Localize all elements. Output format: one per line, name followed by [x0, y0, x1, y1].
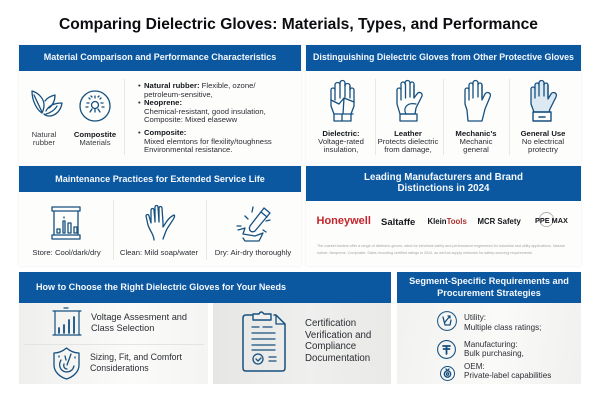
label: leather: from damage,	[384, 145, 432, 154]
title: Comparing Dielectric Gloves: Materials, Types, and Performance	[59, 16, 538, 33]
text: OEM	[464, 362, 551, 380]
icon: manufacturing	[437, 340, 456, 359]
heading: material comparison: Material Comparison and Performance Characteristics	[44, 52, 276, 62]
text: OEM: Private-label capabilities	[464, 371, 551, 380]
icon: general use glove	[530, 80, 558, 122]
icon: leaves	[31, 90, 63, 117]
sub-panel: assessment and sizing	[19, 303, 208, 384]
text: material bullets: petroleum-sensitive,	[144, 90, 213, 98]
heading: distinguishing gloves	[306, 45, 581, 70]
brand: PPE MAX: PPE MAX	[535, 216, 568, 225]
text: material bullets: Chemical-resistant, good insulation,	[144, 106, 266, 116]
text: material bullets: Composite:	[144, 128, 186, 137]
brand: Honeywell: Honeywell	[316, 215, 371, 227]
label: natural rubber: rubber	[33, 138, 55, 147]
icon: composite materials	[79, 90, 111, 122]
text: material bullets: Mixed elemtons for flexility/toughness	[144, 136, 272, 146]
panel: material comparison: •	[138, 81, 141, 90]
icon: dielectric glove	[330, 80, 355, 122]
label: mechanic's: Mechanic's	[455, 128, 497, 138]
icon: clean hand	[145, 204, 176, 241]
label: composite materials: Materials	[79, 138, 111, 147]
panel: material comparison: •	[138, 98, 141, 107]
panel: distinguishing gloves	[306, 45, 581, 162]
text: sizing fit comfort: Sizing, Fit, and Comfort	[90, 352, 182, 362]
text: manufacturing: Manufacturing:	[464, 340, 518, 349]
text: certification verification: Documentation	[305, 353, 370, 364]
panel: segment-specific requirements	[397, 272, 581, 384]
label: general use: protectry	[528, 145, 558, 154]
panel: material comparison: •	[138, 128, 141, 137]
text: material bullets: Neoprene:	[144, 98, 182, 107]
label: natural rubber: Natural	[32, 130, 56, 139]
text: utility	[464, 312, 541, 332]
label: mechanic's: Mechanic	[460, 137, 492, 146]
label: dielectric: insulation,	[324, 145, 358, 154]
heading: distinguishing gloves: Distinguishing Dielectric Gloves from Other Protective Gloves	[313, 52, 574, 62]
text: voltage assessment	[91, 312, 187, 333]
label: store: Store: Cool/dark/dry	[32, 248, 101, 257]
icon: dry brush	[236, 206, 271, 242]
label: dielectric	[318, 128, 364, 154]
text: voltage assessment: Voltage Assesment and	[91, 312, 187, 322]
text: material bullets: Natural rubber: Flexible, ozone/	[144, 81, 256, 90]
text: manufacturing: Bulk purchasing,	[464, 349, 524, 358]
label: general use: No electrical	[522, 137, 564, 146]
heading: how to choose: How to Choose the Right Dielectric Gloves for Your Needs	[36, 282, 286, 292]
heading: maintenance practices	[19, 166, 301, 192]
label: leather: Protects dielectric	[378, 137, 438, 146]
icon: mechanic glove	[464, 80, 492, 122]
text: material bullets: Environmental resistance.	[144, 145, 232, 154]
text: utility: Multiple class ratings;	[464, 322, 541, 332]
label: mechanic's	[455, 128, 497, 154]
sub-panel: certification	[213, 303, 391, 384]
label: general use	[520, 128, 566, 154]
label: dielectric: Voltage-rated	[318, 137, 364, 146]
text: sizing fit comfort: Considerations	[90, 363, 149, 373]
heading: maintenance practices: Maintenance Practices for Extended Service Life	[55, 174, 265, 184]
text: sizing fit comfort	[90, 352, 182, 373]
icon: leather glove	[396, 80, 423, 122]
heading: leading manufacturers	[306, 166, 581, 200]
text: certification verification: Verification and	[305, 330, 371, 341]
text: brand fine print: The market leaders offer a range of dielectric gloves, rated for electrical safety and performance engineered for industrial and utility applications. Natural rubber, Neoprene, Composite. Sales recording certified ratings in 2024, as well as supply networks for safety-sourcing requirements.	[317, 244, 565, 255]
heading: leading manufacturers: Leading Manufacturers and Brand	[364, 172, 523, 182]
icon: clipboard	[242, 311, 286, 372]
panel: leading manufacturers	[306, 166, 581, 266]
text: OEM: OEM:	[464, 362, 485, 370]
label: leather: Leather	[394, 128, 422, 138]
text: material bullets: Composite: Mixed elaseww	[144, 115, 237, 124]
heading: material comparison	[19, 45, 301, 70]
panel: material comparison	[19, 45, 301, 162]
icon: OEM	[440, 366, 455, 381]
brand: KleinTools: KleinTools	[428, 216, 467, 226]
icon: storage chart	[51, 206, 81, 240]
icon: voltage chart	[52, 307, 82, 336]
label: dry: Dry: Air-dry thoroughly	[215, 248, 291, 257]
heading: segment-specific requirements	[397, 272, 581, 303]
text: utility: Utility:	[464, 312, 486, 322]
label: composite materials	[74, 130, 116, 147]
heading: segment-specific requirements: Procurement Strategies	[437, 288, 541, 298]
text: certification verification: Certification	[305, 318, 356, 329]
label: general use: General Use	[521, 128, 565, 138]
heading: leading manufacturers: Distinctions in 2024	[397, 183, 490, 194]
label: natural rubber	[32, 130, 56, 147]
text: manufacturing	[464, 340, 524, 358]
label: clean: Clean: Mild soap/water	[120, 248, 198, 257]
brand: Saltaffe: Saltaffe	[381, 216, 415, 228]
label: dielectric: Dielectric:	[322, 128, 360, 138]
icon: utility	[437, 311, 457, 331]
panel: maintenance practices	[19, 166, 301, 266]
label: mechanic's: general	[463, 145, 489, 154]
text: voltage assessment: Class Selection	[91, 323, 154, 333]
icon: sizing shield	[53, 347, 80, 380]
label: composite materials: Compostite	[74, 130, 116, 139]
brand: MCR Safety: MCR Safety	[478, 216, 521, 226]
text: certification verification: Compliance	[305, 341, 356, 352]
heading: segment-specific requirements: Segment-Specific Requirements and	[409, 276, 569, 286]
panel: how to choose	[19, 272, 391, 384]
label: leather	[378, 128, 438, 154]
brand: PPE MAX	[535, 212, 568, 227]
heading: how to choose	[19, 272, 391, 303]
text: material bullets	[138, 81, 272, 154]
text: certification verification	[305, 318, 371, 364]
